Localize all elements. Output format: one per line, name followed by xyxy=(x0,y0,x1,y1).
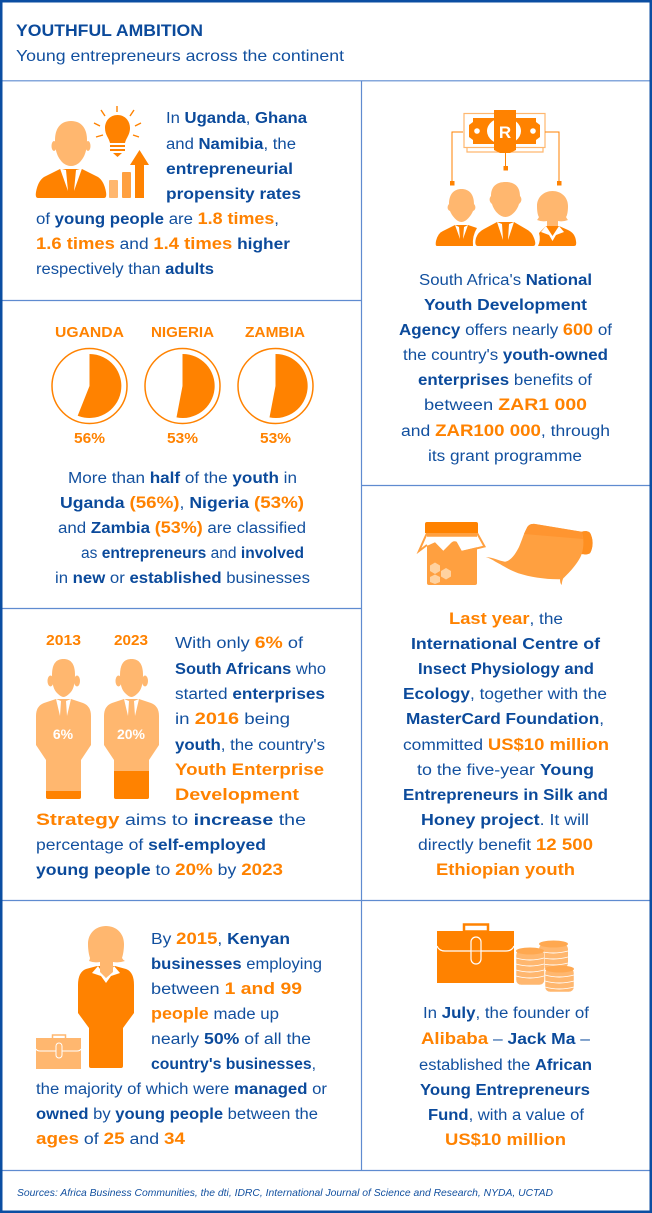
icon: 2013 figure 6%: 6% xyxy=(53,726,74,742)
text block: silk and honey project: committed US$10 million xyxy=(403,736,609,754)
text block: silk and honey project: Ecology , together with the xyxy=(403,686,607,703)
text block: National Youth Development Agency: the country's youth-owned xyxy=(403,347,608,364)
text block: Kenyan businesses xyxy=(36,930,327,1148)
icon: entrepreneur with light bulb and growth chart xyxy=(36,106,149,198)
text block: silk and honey project: Entrepreneurs in Silk and xyxy=(403,787,608,804)
text block: National Youth Development Agency: South Africa's National xyxy=(419,272,592,289)
chart: Nigeria pie: 53% xyxy=(167,430,198,447)
text block: National Youth Development Agency: between ZAR1 000 xyxy=(424,396,587,414)
text block: youth enterprise strategy: Youth Enterprise xyxy=(175,761,324,779)
icon: rand banknote distributed to three people: R xyxy=(499,123,511,142)
text block: silk and honey project xyxy=(403,610,609,879)
text block: youth enterprise strategy: in 2016 being xyxy=(175,710,290,728)
text block: Kenyan businesses: people made up xyxy=(151,1005,279,1023)
text block: Kenyan businesses: between 1 and 99 xyxy=(151,980,302,998)
icon: 2013 figure 6%: 2013 xyxy=(46,632,81,649)
text block: Kenyan businesses: ages of 25 and 34 xyxy=(36,1130,186,1148)
text block: Alibaba fund: US$10 million xyxy=(445,1131,566,1149)
text block: propensity rates: propensity rates xyxy=(166,186,301,203)
text block: Kenyan businesses: businesses employing xyxy=(151,956,322,973)
text block: Kenyan businesses: the majority of which were managed or xyxy=(36,1081,327,1098)
chart: Uganda pie: 56% xyxy=(74,430,105,447)
text block: more than half: as entrepreneurs and involved xyxy=(81,545,304,562)
icon: 2023 figure 20%: 20% xyxy=(117,726,146,742)
text block: National Youth Development Agency: its grant programme xyxy=(428,448,582,465)
text block: youth enterprise strategy: With only 6% of xyxy=(175,634,304,652)
title: YOUTHFUL AMBITION xyxy=(16,21,203,40)
text block: youth enterprise strategy: percentage of self-employed xyxy=(36,837,266,854)
text block: silk and honey project: directly benefit 12 500 xyxy=(418,836,593,854)
text block: Alibaba fund: Fund, with a value of xyxy=(428,1107,585,1124)
subtitle: Young entrepreneurs across the continent xyxy=(16,48,345,65)
icon: rand banknote distributed to three people xyxy=(436,110,576,246)
text block: silk and honey project: Honey project . It will xyxy=(421,812,589,829)
text block: National Youth Development Agency: Agency offers nearly 600 of xyxy=(399,321,613,339)
chart: Uganda pie xyxy=(52,324,127,447)
text block: propensity rates: respectively than adults xyxy=(36,261,214,278)
icon: briefcase and coin stacks xyxy=(437,924,574,992)
text block: Kenyan businesses: country's businesses, xyxy=(151,1056,316,1073)
chart: Zambia pie: ZAMBIA xyxy=(245,324,305,341)
text block: National Youth Development Agency: and ZAR100 000 , through xyxy=(401,422,610,440)
chart: Zambia pie: 53% xyxy=(260,430,291,447)
text block: propensity rates: of young people are 1.8 times , xyxy=(36,210,279,228)
icon: silk roll xyxy=(486,524,593,585)
text block: youth enterprise strategy: youth, the country's xyxy=(175,737,325,754)
text block: Alibaba fund: Alibaba – Jack Ma – xyxy=(421,1030,590,1048)
text block: silk and honey project: MasterCard Foundation , xyxy=(406,711,604,728)
text block: Kenyan businesses: owned by young people between the xyxy=(36,1106,318,1123)
text block: Alibaba fund: In July, the founder of xyxy=(423,1005,590,1022)
icon: businesswoman with briefcase xyxy=(36,926,134,1069)
text block: propensity rates: entrepreneurial xyxy=(166,161,293,178)
text block: youth enterprise strategy: South Africans who xyxy=(175,661,326,678)
text block: silk and honey project: International Centre of xyxy=(411,636,601,653)
text block: silk and honey project: Ethiopian youth xyxy=(436,861,575,879)
icon: honey jar xyxy=(419,522,484,585)
icon: 2013 figure 6% xyxy=(36,632,91,799)
text block: propensity rates: In Uganda , Ghana xyxy=(166,110,307,127)
text block: youth enterprise strategy: young people to 20% by 2023 xyxy=(36,861,283,879)
icon: 2023 figure 20% xyxy=(104,632,159,799)
text block: silk and honey project: Last year , the xyxy=(449,610,563,628)
chart: Uganda pie: UGANDA xyxy=(55,324,124,341)
text block: Alibaba fund: established the African xyxy=(419,1057,592,1074)
text block: silk and honey project: to the five-year Young xyxy=(417,762,594,779)
text block: silk and honey project: Insect Physiology and xyxy=(418,661,594,678)
chart: Zambia pie xyxy=(238,324,313,447)
text block: propensity rates xyxy=(36,110,307,278)
sources: Sources: Africa Business Communities, the dti, IDRC, International Journal of Science and Research, NYDA, UCTAD xyxy=(17,1187,553,1199)
text block: more than half: in new or established businesses xyxy=(55,570,310,587)
text block: youth enterprise strategy: Strategy aims to increase the xyxy=(36,811,306,829)
text block: youth enterprise strategy: Development xyxy=(175,786,300,804)
text block: more than half: and Zambia (53%) are classified xyxy=(58,519,306,537)
chart: Nigeria pie xyxy=(145,324,220,447)
text block: Alibaba fund xyxy=(419,1005,592,1149)
text block: Kenyan businesses: nearly 50% of all the xyxy=(151,1031,311,1048)
text block: Kenyan businesses: By 2015 , Kenyan xyxy=(151,930,290,948)
text block: propensity rates: and Namibia , the xyxy=(166,136,296,153)
text block: propensity rates: 1.6 times and 1.4 times higher xyxy=(36,235,290,253)
text block: more than half: More than half of the youth in xyxy=(68,470,297,487)
text block: National Youth Development Agency xyxy=(399,272,613,465)
text block: youth enterprise strategy: started enterprises xyxy=(175,686,325,703)
text block: National Youth Development Agency: enterprises benefits of xyxy=(418,372,593,389)
text block: more than half xyxy=(55,470,310,587)
text block: Alibaba fund: Young Entrepreneurs xyxy=(420,1082,590,1099)
text block: National Youth Development Agency: Youth Development xyxy=(424,297,587,314)
text block: youth enterprise strategy xyxy=(36,634,326,879)
text block: more than half: Uganda (56%) , Nigeria (53%) xyxy=(60,494,304,512)
icon: 2023 figure 20%: 2023 xyxy=(114,632,148,649)
chart: Nigeria pie: NIGERIA xyxy=(151,324,214,341)
